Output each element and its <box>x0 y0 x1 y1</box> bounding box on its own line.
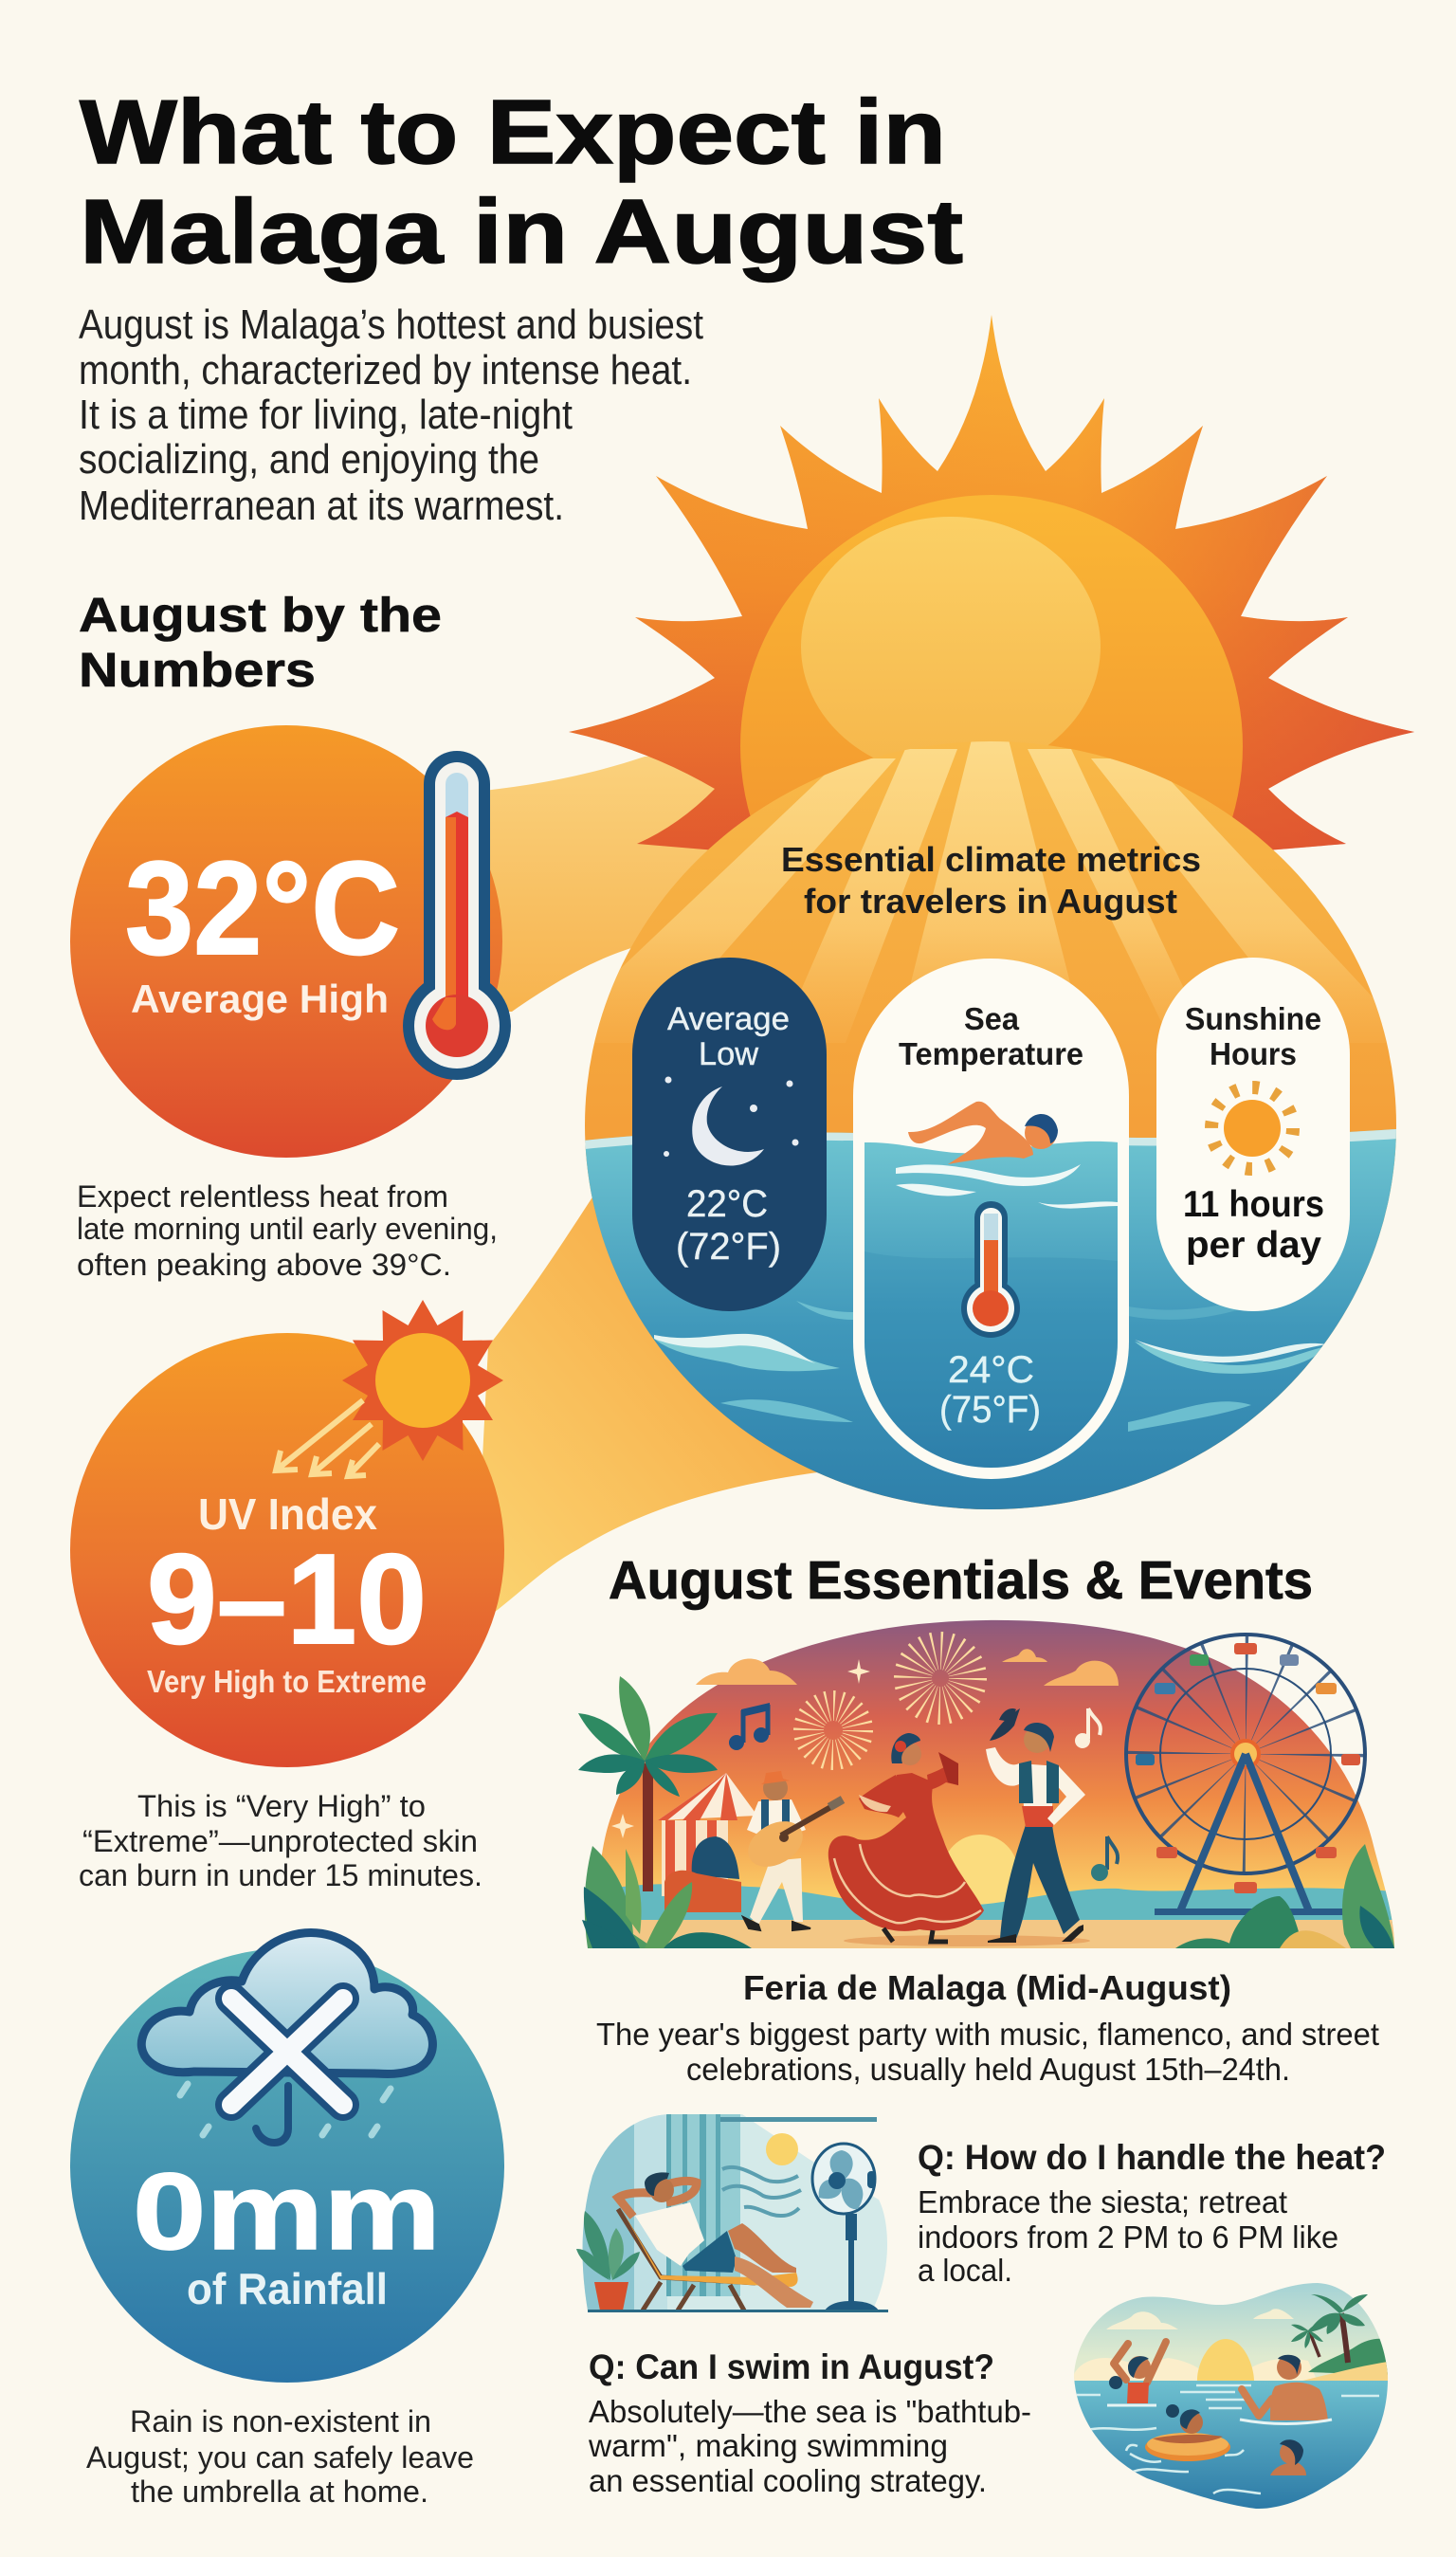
fireworks <box>809 1651 968 1755</box>
text: average high description: Expect relentless heat from <box>77 1179 448 1214</box>
plant <box>576 2211 640 2310</box>
text: heat Q and A <box>918 2138 1386 2288</box>
card: sunshine hours: Sunshine <box>1185 1001 1321 1036</box>
connector: UV to climate circle <box>474 1176 853 1627</box>
heading: August by the Numbers <box>79 588 442 697</box>
intro text: August is Malaga’s hottest and busiest <box>79 301 703 348</box>
card: sunshine hours: per day <box>1186 1225 1321 1266</box>
card: sunshine hours: Hours <box>1210 1036 1297 1071</box>
card: sea temperature <box>853 959 1129 1479</box>
climate heading: for travelers in August <box>804 882 1177 921</box>
icon: swimmer <box>908 1102 1058 1164</box>
circus tent <box>658 1773 757 1896</box>
card: sea temperature: Temperature <box>899 1036 1083 1071</box>
text: Feria de Malaga: The year's biggest party with music, flamenco, and street <box>596 2017 1379 2052</box>
illustration: Feria festival scene <box>578 1620 1394 1950</box>
title: What to Expect in <box>80 82 946 183</box>
text: UV description <box>79 1789 482 1892</box>
text: swim Q and A: Q: Can I swim in August? <box>589 2347 994 2386</box>
text: heat Q and A: Embrace the siesta; retreat <box>918 2184 1287 2219</box>
connector: high temperature to climate circle <box>474 749 777 1012</box>
card: average low: Average <box>667 1001 790 1037</box>
stat: UV index: UV Index <box>198 1489 377 1539</box>
text: heat Q and A: indoors from 2 PM to 6 PM like <box>918 2219 1338 2255</box>
sea <box>585 1129 1396 1509</box>
guitarist <box>740 1771 843 1930</box>
card: sea temperature: Sea <box>964 1001 1020 1036</box>
icon: sea thermometer <box>961 1201 1020 1338</box>
icon: thermometer <box>403 751 511 1080</box>
card: sea temperature: (75°F) <box>939 1389 1041 1431</box>
text: Feria de Malaga: celebrations, usually held August 15th–24th. <box>686 2052 1290 2087</box>
icon: moon <box>692 1087 764 1166</box>
flamenco dancer <box>828 1733 984 1942</box>
intro text: It is a time for living, late-night <box>79 392 573 438</box>
text: average high description: late morning until early evening, <box>77 1212 498 1246</box>
wind lines <box>722 2167 801 2216</box>
text: swim Q and A: warm", making swimming <box>588 2428 948 2463</box>
climate heading <box>781 840 1201 921</box>
stat: UV index: Very High to Extreme <box>147 1664 427 1699</box>
male dancer <box>986 1708 1085 1943</box>
icon: UV arrows <box>276 1400 379 1476</box>
child in water <box>1270 2439 1306 2475</box>
text: Feria de Malaga <box>596 1968 1379 2087</box>
text: UV description: This is “Very High” to <box>137 1789 426 1823</box>
illustration: swimmers at the beach <box>1071 2275 1393 2512</box>
clouds <box>696 1649 1119 1686</box>
text: average high description: often peaking above 39°C. <box>77 1248 451 1282</box>
music notes <box>729 1703 1118 1881</box>
text: swim Q and A <box>588 2347 1031 2498</box>
text: rainfall description: Rain is non-existent in <box>130 2404 431 2438</box>
card: average low: Low <box>699 1036 758 1072</box>
climate heading: Essential climate metrics <box>781 840 1201 879</box>
card: average low <box>632 958 827 1311</box>
intro text: socializing, and enjoying the <box>79 436 539 483</box>
text: UV description: can burn in under 15 minutes. <box>79 1858 482 1892</box>
panel: climate metrics circle <box>585 741 1396 1509</box>
text: rainfall description: the umbrella at home. <box>131 2475 428 2509</box>
title <box>80 82 963 283</box>
stat: average high <box>70 725 511 1158</box>
reclining man <box>618 2172 813 2308</box>
stat: rainfall: of Rainfall <box>187 2264 388 2313</box>
fan <box>812 2144 879 2310</box>
card: sunshine hours: 11 hours <box>1183 1184 1324 1225</box>
card: average low: (72°F) <box>676 1226 781 1268</box>
palm tree <box>578 1676 718 1891</box>
sun rays <box>597 741 1384 1032</box>
woman waving <box>1107 2342 1166 2405</box>
text: heat Q and A: Q: How do I handle the heat? <box>918 2138 1386 2177</box>
lounge chair <box>618 2209 798 2310</box>
heading: August by the Numbers: August by the <box>79 588 442 642</box>
stat: average high: Average High <box>131 977 389 1021</box>
stat: rainfall <box>70 1933 504 2383</box>
stat: rainfall: 0mm <box>133 2151 441 2273</box>
intro text <box>79 301 703 529</box>
heading: August Essentials & Events: August Essentials & Events <box>609 1550 1313 1611</box>
stat: average high: 32°C <box>125 833 400 982</box>
stat: UV index: 9–10 <box>147 1527 427 1671</box>
card: sea temperature: 24°C <box>948 1349 1034 1391</box>
intro text: Mediterranean at its warmest. <box>79 483 564 529</box>
sparkle <box>611 1814 634 1838</box>
trunk and drum <box>664 1836 741 1912</box>
card: sunshine hours <box>1156 958 1350 1311</box>
man in water <box>1240 2355 1332 2423</box>
stat: UV index <box>70 1300 504 1767</box>
text: heat Q and A: a local. <box>918 2253 1012 2288</box>
text: Feria de Malaga: Feria de Malaga (Mid-August) <box>743 1968 1231 2007</box>
text: rainfall description: August; you can safely leave <box>86 2440 474 2475</box>
title: Malaga in August <box>80 181 963 283</box>
icon: small sun <box>1211 1087 1293 1169</box>
card: average low: 22°C <box>686 1183 768 1225</box>
text: average high description <box>77 1179 498 1282</box>
text: swim Q and A: Absolutely—the sea is "bathtub- <box>589 2394 1031 2429</box>
icon: cloud with crossed umbrella <box>141 1933 432 2143</box>
foliage <box>582 1844 1394 1948</box>
sparkle <box>847 1659 870 1684</box>
intro text: month, characterized by intense heat. <box>79 347 692 393</box>
illustration: relaxing by a fan <box>576 2110 888 2313</box>
text: UV description: “Extreme”—unprotected skin <box>82 1824 478 1858</box>
icon: large sun <box>569 315 1414 997</box>
text: swim Q and A: an essential cooling strategy. <box>589 2463 987 2498</box>
text: rainfall description <box>86 2404 474 2509</box>
icon: UV sun <box>342 1300 503 1461</box>
person on swim ring <box>1145 2404 1230 2461</box>
heading: August by the Numbers: Numbers <box>79 643 316 697</box>
ferris wheel <box>1126 1635 1365 1915</box>
palms <box>1291 2294 1368 2363</box>
